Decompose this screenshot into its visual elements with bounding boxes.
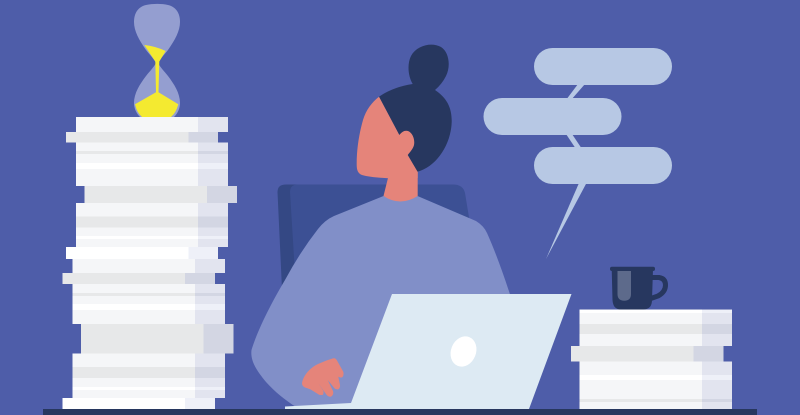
mug rim — [610, 267, 655, 271]
left paper stack — [62, 117, 237, 409]
sheet 7 — [72, 259, 225, 273]
bubble connector middle — [566, 134, 582, 149]
bubble tail — [546, 183, 586, 259]
face — [357, 97, 418, 178]
bubble bottom — [534, 147, 672, 184]
sheet 3 — [76, 142, 228, 186]
bubble middle — [484, 98, 622, 135]
sand — [135, 45, 178, 117]
sheet bottom — [580, 362, 732, 409]
sweater — [251, 196, 515, 408]
sheet 6 — [66, 247, 218, 259]
sheet 2 — [66, 132, 218, 142]
bubble top — [534, 48, 672, 85]
laptop logo — [446, 332, 481, 371]
hair — [379, 45, 452, 172]
hand — [302, 358, 344, 397]
sheet middle — [571, 346, 724, 362]
laptop body — [285, 294, 572, 409]
glass — [134, 4, 180, 117]
coffee mug — [610, 267, 666, 310]
sheet 9 — [72, 284, 225, 324]
hourglass — [134, 4, 180, 117]
neck — [384, 165, 418, 202]
office chair — [278, 184, 476, 300]
person — [251, 45, 515, 408]
bubble connector top — [566, 84, 585, 100]
sheet 11 — [72, 354, 225, 398]
right paper stack — [571, 310, 732, 409]
sheet 4 — [84, 186, 237, 203]
sheet top — [580, 310, 732, 346]
sheet 12 — [62, 398, 215, 409]
mug highlight — [618, 271, 631, 301]
sheet 1 — [76, 117, 228, 132]
desk — [43, 409, 757, 415]
laptop — [285, 294, 572, 409]
sheet 5 — [76, 203, 228, 247]
speech bubbles — [484, 48, 672, 259]
sheet 10 — [81, 324, 234, 354]
mug body — [612, 269, 653, 310]
mug handle — [648, 278, 666, 300]
sheet 8 — [62, 273, 215, 284]
